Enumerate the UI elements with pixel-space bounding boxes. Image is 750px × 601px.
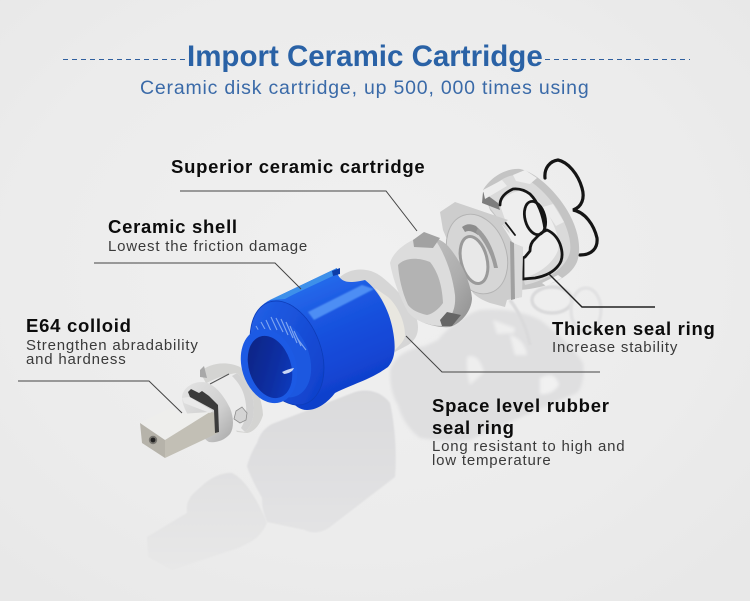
front step xyxy=(237,291,337,415)
ceramic shell heading: Ceramic shell xyxy=(108,216,238,237)
light collar face xyxy=(182,397,213,413)
leader line: ceramic shell xyxy=(94,263,301,289)
label: E64 colloid xyxy=(26,315,199,368)
ceramic shell description: Lowest the friction damage xyxy=(108,238,308,255)
E64 colloid heading: E64 colloid xyxy=(26,315,132,336)
space level heading: seal ring xyxy=(432,417,515,438)
E64 colloid description: Strengthen abradability xyxy=(26,337,199,354)
space level heading: Space level rubber xyxy=(432,395,610,416)
square shaft front face xyxy=(140,423,165,458)
thicken seal ring heading: Thicken seal ring xyxy=(552,318,716,339)
disk rim xyxy=(415,236,472,327)
disk face xyxy=(390,238,455,326)
shell body xyxy=(252,268,395,410)
shell highlight band xyxy=(308,285,374,320)
space level description xyxy=(432,438,625,469)
label: space level rubber seal ring xyxy=(432,395,625,469)
plate side xyxy=(512,243,523,299)
reflection of blue shell xyxy=(247,390,396,532)
neck cylinder xyxy=(205,373,254,432)
housing tab right xyxy=(543,204,564,226)
icon: inner seal rings xyxy=(500,189,562,279)
space level description: low temperature xyxy=(432,452,552,469)
square shaft side face xyxy=(165,412,218,458)
ribbed neck xyxy=(240,309,322,407)
icon: blue ceramic shell xyxy=(232,268,395,415)
shaft hole xyxy=(149,436,157,444)
label: thicken seal ring xyxy=(552,318,716,356)
flange xyxy=(200,363,263,433)
space level heading xyxy=(432,395,610,438)
mouth glint xyxy=(282,368,294,374)
front mouth xyxy=(232,322,306,410)
leader line: E64 colloid xyxy=(18,381,182,413)
upper arc xyxy=(500,189,545,230)
clip slot xyxy=(188,389,219,433)
ring body xyxy=(340,269,418,352)
disk centre panel xyxy=(398,259,443,315)
neck shadow xyxy=(232,373,254,432)
housing window xyxy=(500,191,559,278)
icon: E64 colloid shaft assembly xyxy=(140,363,263,458)
oval ring xyxy=(521,199,549,237)
housing dark edge xyxy=(482,192,500,210)
square shaft top xyxy=(140,408,210,440)
front collar xyxy=(182,382,233,442)
reflection of ring and disks xyxy=(390,309,584,441)
hex bolt xyxy=(234,407,247,423)
housing tab bottom xyxy=(542,275,562,286)
icon: outer seal ring lobes xyxy=(545,160,597,255)
housing tab left xyxy=(483,180,507,199)
icon: rubber seal ring behind blue shell xyxy=(340,269,418,352)
icon: outer housing plate xyxy=(482,169,579,290)
space level description: Long resistant to high and xyxy=(432,438,625,455)
mouth inner xyxy=(240,330,300,404)
bottom notch xyxy=(440,312,461,326)
header dashed rule xyxy=(63,58,690,60)
leader line: space level rubber seal ring xyxy=(406,336,600,372)
E64 colloid description xyxy=(26,337,199,368)
plate face xyxy=(436,206,518,302)
reflection of seal rings xyxy=(510,287,601,345)
lower ring xyxy=(523,230,562,279)
title: Import Ceramic Cartridge xyxy=(187,40,543,73)
notch line xyxy=(210,374,229,384)
label: ceramic shell xyxy=(108,216,308,255)
label: superior ceramic cartridge: Superior ceramic cartridge xyxy=(171,156,425,177)
housing face xyxy=(487,175,570,285)
shell top strip xyxy=(270,268,337,300)
housing tab top xyxy=(513,170,537,184)
reflection of shaft xyxy=(147,473,267,570)
subtitle: Ceramic disk cartridge, up 500, 000 times using xyxy=(140,77,589,99)
neck ribs xyxy=(256,317,306,350)
top notch xyxy=(413,232,440,248)
thicken seal ring description: Increase stability xyxy=(552,339,678,356)
E64 colloid description: and hardness xyxy=(26,351,127,368)
flange notch xyxy=(200,366,207,378)
housing body xyxy=(483,169,579,290)
ring inner band xyxy=(375,288,405,350)
leader line: thicken seal ring xyxy=(548,273,655,307)
plate outline xyxy=(440,202,523,307)
icon: grey retainer plate xyxy=(436,202,523,307)
plate slots xyxy=(462,224,482,235)
plate centre hole xyxy=(456,234,492,286)
icon: superior ceramic disk xyxy=(390,232,472,327)
shell tab xyxy=(332,268,340,276)
leader line: superior ceramic cartridge xyxy=(180,191,417,231)
short connector xyxy=(505,222,515,235)
